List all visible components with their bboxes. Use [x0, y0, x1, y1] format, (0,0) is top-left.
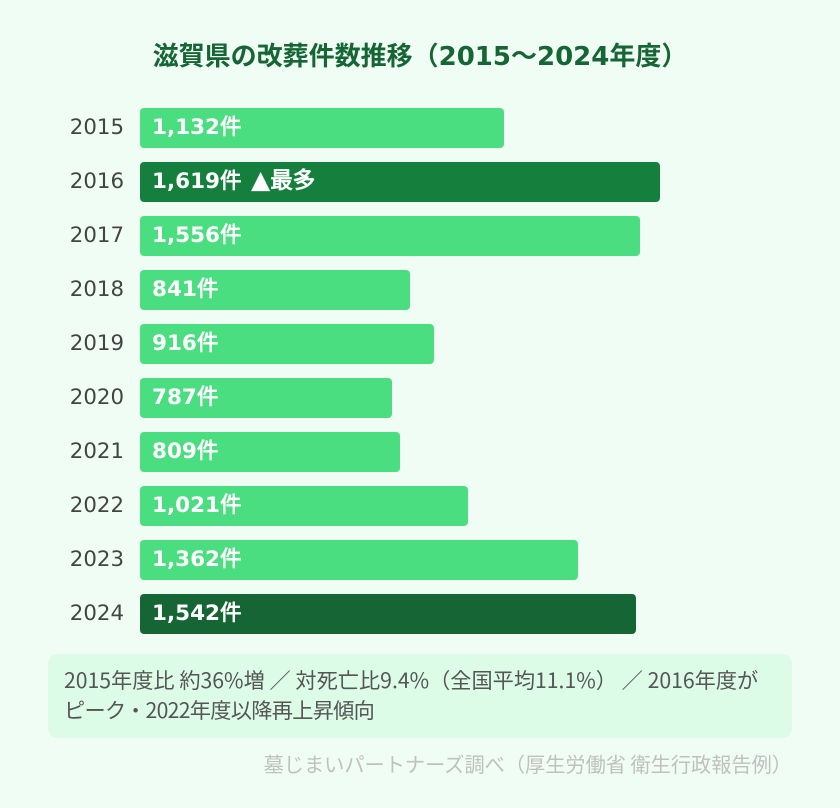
- bar row: 2021: 809件: [152, 439, 218, 464]
- bar row: 2020: [70, 378, 392, 418]
- source credit: 墓じまいパートナーズ調べ（厚生労働省 衛生行政報告例）: [264, 749, 792, 778]
- bar row: 2017: 2017: [70, 223, 124, 248]
- bar row: 2024: 1,542件: [152, 601, 242, 626]
- bar row: 2020: 787件: [152, 385, 218, 410]
- bar row: 2022: [70, 486, 468, 526]
- bar row: 2024: [70, 594, 636, 634]
- bar row: 2017: [70, 216, 640, 256]
- bar row: 2021: 2021: [70, 439, 124, 464]
- bar row: 2017: 1,556件: [152, 223, 242, 248]
- bar row: 2018: 841件: [152, 277, 218, 302]
- bar row: 2024: 2024: [70, 601, 124, 626]
- bar row: 2018: 2018: [70, 277, 124, 302]
- bar row: 2018: [70, 270, 410, 310]
- bar row: 2019: 2019: [70, 331, 124, 356]
- summary note: ピーク・2022年度以降再上昇傾向: [64, 694, 374, 725]
- summary note: 2015年度比 約36%増 ／ 対死亡比9.4%（全国平均11.1%） ／ 2016年度が: [64, 664, 758, 695]
- bar row: 2023: [70, 540, 578, 580]
- summary note: [48, 654, 792, 738]
- bar row: 2019: [70, 324, 434, 364]
- bar row: 2016: [70, 162, 660, 202]
- bar row: 2021: [70, 432, 400, 472]
- bar row: 2023: 2023: [70, 547, 124, 572]
- bar row: 2022: 1,021件: [152, 493, 242, 518]
- bar row: 2020: 2020: [70, 385, 124, 410]
- bar row: 2016: 2016: [70, 169, 124, 194]
- bar row: 2015: [70, 108, 504, 148]
- title: 滋賀県の改葬件数推移（2015～2024年度）: [153, 42, 687, 72]
- bar row: 2022: 2022: [70, 493, 124, 518]
- bar row: 2016: 1,619件 ▲最多: [152, 165, 315, 194]
- bar row: 2015: 1,132件: [152, 115, 242, 140]
- bar row: 2019: 916件: [152, 331, 218, 356]
- bar row: 2015: 2015: [70, 115, 124, 140]
- bar row: 2023: 1,362件: [152, 547, 242, 572]
